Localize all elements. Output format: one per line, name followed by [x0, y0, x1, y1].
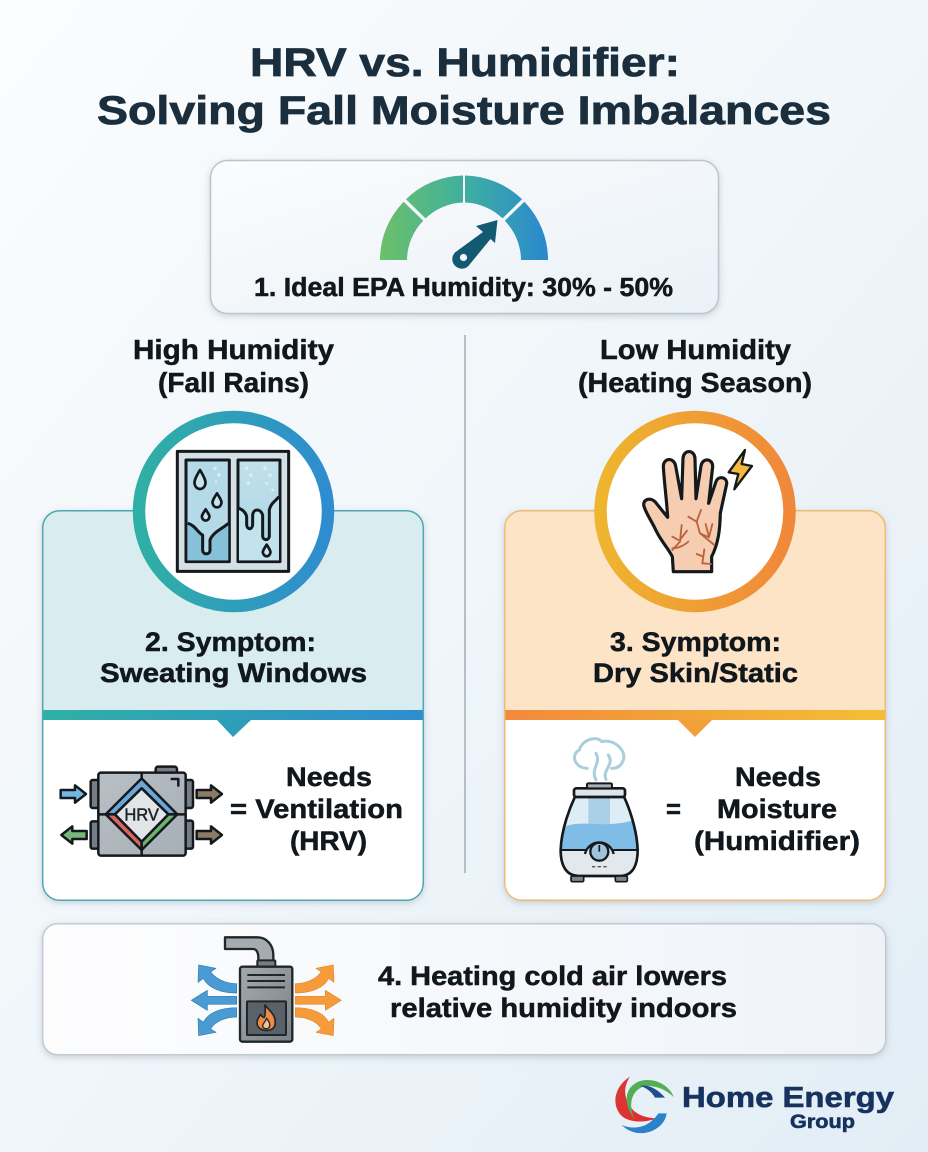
ventilation text [230, 762, 403, 856]
moisture text: Moisture [717, 794, 837, 824]
heating text: relative humidity indoors [390, 993, 737, 1023]
logo mark [615, 1077, 674, 1133]
equals sign: = [666, 794, 681, 824]
title: HRV vs. Humidifier: [250, 41, 680, 85]
heading: high humidity: (Fall Rains) [158, 367, 309, 398]
panel: sweating windows [42, 510, 424, 901]
logo text [682, 1082, 894, 1133]
panel: ideal humidity gauge [210, 160, 718, 314]
panel: dry skin [504, 510, 886, 901]
icon circle: sweating window [139, 417, 328, 606]
symptom text [593, 627, 798, 688]
symptom text: Dry Skin/Static [593, 658, 798, 688]
symptom text [100, 627, 367, 688]
center divider [464, 335, 466, 873]
icon: HRV unit [61, 767, 222, 856]
ventilation text: Needs [286, 762, 372, 792]
icon: cracked hand with static spark [644, 450, 752, 572]
icon: humidifier [561, 739, 638, 882]
icon circle: dry hand [600, 417, 790, 606]
icon: window with condensation [177, 451, 289, 571]
icon: humidity gauge [380, 176, 548, 269]
heading: high humidity [133, 334, 335, 398]
icon: HRV unit: HRV [124, 805, 159, 825]
logo text: Home Energy [682, 1082, 894, 1114]
moisture text: Needs [735, 762, 821, 792]
moisture text: (Humidifier) [694, 826, 860, 856]
heading: low humidity: Low Humidity [600, 334, 792, 365]
heating text [378, 961, 737, 1023]
icon: furnace with air arrows [191, 937, 341, 1042]
symptom text: 2. Symptom: [145, 627, 316, 657]
logo: Home Energy Group [615, 1077, 894, 1133]
heading: high humidity: High Humidity [133, 334, 335, 365]
ventilation text: = Ventilation [230, 794, 403, 824]
heating text: 4. Heating cold air lowers [378, 961, 727, 991]
moisture text [694, 762, 860, 856]
ventilation text: (HRV) [290, 826, 367, 856]
panel: heating lowers humidity [43, 924, 886, 1055]
heading: low humidity: (Heating Season) [578, 367, 812, 398]
title: Solving Fall Moisture Imbalances [97, 89, 831, 133]
title [97, 41, 831, 133]
symptom text: 3. Symptom: [610, 627, 781, 657]
symptom text: Sweating Windows [100, 658, 367, 688]
logo text: Group [790, 1111, 855, 1133]
gauge label: 1. Ideal EPA Humidity: 30% - 50% [254, 274, 673, 302]
heading: low humidity [578, 334, 812, 398]
